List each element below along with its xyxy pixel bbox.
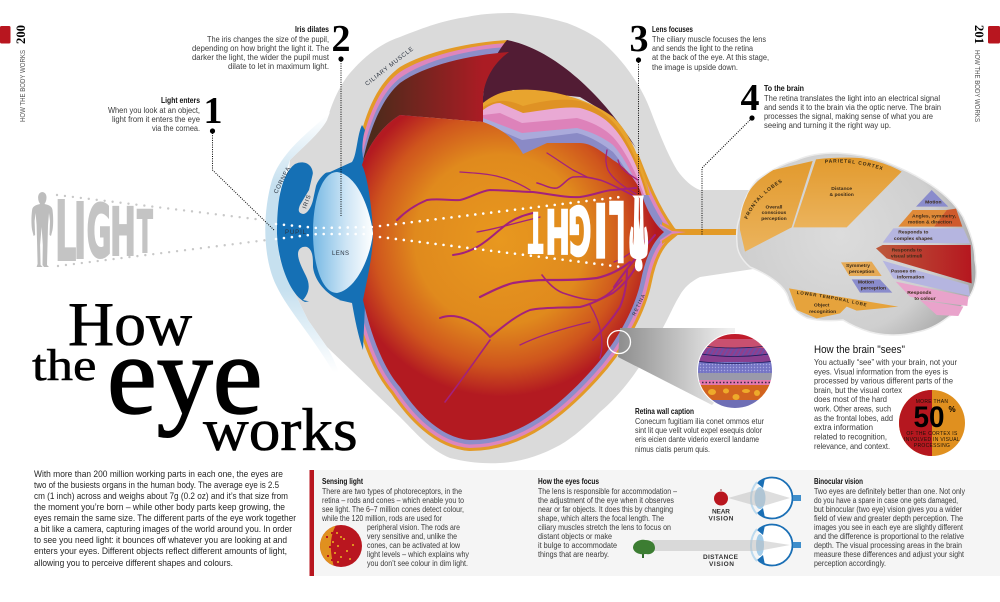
lower temporal lobe region xyxy=(789,288,898,318)
frontal lobes region xyxy=(740,161,813,252)
body: depending on how bright the light it. The xyxy=(192,44,330,53)
word: LIGHT in perspective: I xyxy=(74,188,86,277)
label: iris: IRIS xyxy=(302,194,313,210)
how the eyes focus column xyxy=(538,476,801,568)
body: peripheral vision. The rods are xyxy=(367,523,460,532)
body: perception accordingly. xyxy=(814,559,886,568)
title: works xyxy=(203,397,358,464)
numeral 3: 3 xyxy=(630,18,648,60)
body: The ciliary muscle focuses the lens xyxy=(652,35,766,44)
region labels: perception xyxy=(761,216,787,222)
magnifier cone xyxy=(618,328,735,405)
body: see light. The 6–7 million cones detect colour, xyxy=(322,505,464,514)
lens xyxy=(754,487,766,509)
brain diagram xyxy=(736,152,977,336)
lobe titles: PARIETEL CORTEX xyxy=(825,159,883,170)
region labels: & position xyxy=(829,192,854,198)
optic nerve xyxy=(793,495,801,501)
region labels: Angles, symmetry, xyxy=(912,213,957,219)
body: field of view and greater depth perception. The xyxy=(814,514,963,523)
body xyxy=(652,35,769,72)
cornea front xyxy=(750,523,761,567)
intro paragraph: enters your eyes. Different objects reflect different amounts of light, xyxy=(34,546,287,557)
step 2: iris dilates xyxy=(192,18,350,216)
inverted LIGHT image on retina: I xyxy=(593,187,608,271)
title: the xyxy=(32,341,96,390)
gray dotted rays xyxy=(57,195,267,266)
sensing light column xyxy=(320,477,469,568)
ciliary wedges xyxy=(757,525,765,565)
intro paragraph: the moment you’re born – while other body parts keep growing, the xyxy=(34,502,285,513)
heading: Sensing light xyxy=(322,477,363,486)
caption body: Conecum fugitiam ilia conet ommos etur xyxy=(635,417,764,426)
body: darker the light, the wider the pupil must xyxy=(192,53,330,62)
intro paragraph: to see you need light: it bounces off whatever you are looking at and xyxy=(34,535,287,546)
motion perception region xyxy=(852,279,892,293)
body: and sends the light to the retina xyxy=(652,44,753,53)
incoming light: man and LIGHT word xyxy=(31,184,267,280)
intro paragraph: With more than 200 million working parts in each one, the eyes are xyxy=(34,469,283,480)
binocular vision column xyxy=(814,477,965,568)
cutaway layers xyxy=(483,90,650,195)
icon: standing man silhouette xyxy=(31,192,53,267)
step 1: light enters xyxy=(108,90,274,230)
body: very sensitive and, unlike the xyxy=(367,532,457,541)
icon: apple xyxy=(714,489,728,506)
callout: 50 percent circle: % xyxy=(948,405,956,414)
colour region upper xyxy=(896,282,968,306)
brain outline xyxy=(737,153,976,335)
region labels: Overall xyxy=(766,204,783,210)
body: The iris changes the size of the pupil, xyxy=(207,35,329,44)
region labels: Motion xyxy=(925,200,942,206)
caption body: nimus ciatis perum quis. xyxy=(635,445,710,454)
region labels: Responds to xyxy=(892,248,922,254)
retina wall caption xyxy=(635,407,764,454)
page tab right: number and running head xyxy=(972,25,1000,122)
inverted LIGHT image on retina: G xyxy=(568,191,591,268)
body: depth. The visual processing areas in the brain xyxy=(814,541,962,550)
body xyxy=(538,487,677,559)
caption body: eris eicien dante viderio exercil landame xyxy=(635,435,759,444)
page tab right: number and running head: HOW THE BODY WORKS xyxy=(973,50,980,122)
distance vision diagram xyxy=(633,523,801,568)
word: LIGHT in perspective: H xyxy=(110,195,136,272)
heading: To the brain xyxy=(764,84,804,93)
cornea xyxy=(265,112,347,398)
body: related to recognition, xyxy=(814,432,887,442)
eye wall upper: orange, pink, purple tapered layers xyxy=(361,40,508,170)
label: lens: LENS xyxy=(332,251,350,257)
word: LIGHT in perspective: T xyxy=(137,199,153,266)
body: the adjustment of the eye when it observes xyxy=(538,496,674,505)
page tab left: number and running head: 200 xyxy=(13,25,28,44)
body: ciliary muscles stretch the lens to focus on xyxy=(538,523,671,532)
body xyxy=(108,106,201,133)
angles region red part xyxy=(934,209,962,227)
inverted LIGHT image on retina: H xyxy=(545,195,570,265)
iris gap lower xyxy=(298,247,340,304)
retina wall magnifier xyxy=(608,328,775,413)
body: do you have a spare in case one gets damaged, xyxy=(814,496,958,505)
panel background xyxy=(310,470,1000,576)
heading: Light enters xyxy=(161,96,200,105)
choroid cutaway dark plum xyxy=(483,40,636,148)
callout: 50 percent circle: MORE THAN xyxy=(916,399,948,405)
angles region xyxy=(898,210,947,227)
body: Two eyes are definitely better than one. Not only xyxy=(814,487,965,496)
intro paragraph: cm (1 inch) across and weighs about 7g (0.2 oz) and it’s that size from xyxy=(34,491,288,502)
region labels: perception xyxy=(849,269,874,275)
how the brain sees panel xyxy=(813,344,965,456)
region labels: conscious xyxy=(762,210,787,216)
numeral 2: 2 xyxy=(332,18,350,60)
word: LIGHT in perspective: G xyxy=(86,191,112,275)
caption body xyxy=(635,417,764,454)
region labels: Symmetry xyxy=(846,263,870,269)
magnifier ring on eye wall xyxy=(608,330,630,354)
inverted LIGHT image on retina: L xyxy=(609,182,626,277)
step 3: lens focuses xyxy=(630,18,769,195)
eye outline xyxy=(752,478,792,518)
body xyxy=(814,487,965,568)
eye wall lower: orange, pink, purple layers xyxy=(363,158,664,440)
body: When you look at an object, xyxy=(108,106,200,115)
intro paragraph: eyes remain the same size. The different parts of the eye work together xyxy=(34,513,296,524)
word: LIGHT in perspective xyxy=(55,184,153,280)
body xyxy=(321,487,469,568)
body: it bulge to accommodate xyxy=(538,541,617,550)
body xyxy=(192,35,330,71)
callout: 50 percent circle xyxy=(899,390,965,456)
body: seeing and turning it the right way up. xyxy=(764,121,891,130)
region labels: Responds to xyxy=(898,230,928,236)
blue ciliary body and iris xyxy=(277,125,378,350)
label: retina: RETINA xyxy=(631,293,647,317)
body: as the frontal lobes, add xyxy=(814,414,893,423)
word: LIGHT in perspective: L xyxy=(55,184,76,280)
step 4: to the brain xyxy=(702,77,941,235)
body: brain, but the visual cortex xyxy=(814,386,902,395)
icon: tree xyxy=(633,540,655,558)
intro paragraph: allowing you to perceive different shapes and colours. xyxy=(34,558,233,569)
label: distance vision: VISION xyxy=(709,561,734,568)
label: near vision: NEAR xyxy=(712,508,730,516)
red accent bar xyxy=(310,470,314,576)
body: The retina translates the light into an electrical signal xyxy=(764,94,940,103)
region labels: Passes on xyxy=(891,268,916,274)
label: distance vision xyxy=(703,554,739,568)
motion region xyxy=(916,190,948,207)
eye cross-section diagram xyxy=(265,13,760,463)
optic nerve xyxy=(660,222,748,244)
region labels: information xyxy=(897,275,924,281)
magnified retina layers xyxy=(698,334,772,408)
heading: Iris dilates xyxy=(295,25,329,34)
leader line xyxy=(338,56,344,216)
body: The lens is responsible for accommodation – xyxy=(538,487,677,496)
body: dilate to let in maximum light. xyxy=(228,62,329,71)
body: You actually “see” with your brain, not your xyxy=(814,358,957,367)
region labels: to colour xyxy=(914,296,936,302)
region labels: Responds xyxy=(907,290,932,296)
light beam xyxy=(652,540,790,551)
title: eye xyxy=(107,314,262,438)
leader line xyxy=(702,115,755,235)
body: at the back of the eye. At this stage, xyxy=(652,53,769,62)
eyeball interior with retina gradient xyxy=(362,115,664,440)
body xyxy=(813,358,957,451)
lobe titles xyxy=(744,159,883,306)
body: extra information xyxy=(814,423,873,432)
numeral 1: 1 xyxy=(204,90,222,132)
body: cones, can be activated at low xyxy=(367,541,460,550)
lens xyxy=(313,172,373,293)
callout: 50 percent circle: INVOLVED IN VISUAL xyxy=(904,437,960,443)
region labels: motion & direction xyxy=(908,219,952,225)
page tab left: number and running head: HOW THE BODY WORKS xyxy=(20,50,27,122)
visual stimuli region xyxy=(876,245,972,283)
white light ray dots through the eye xyxy=(276,197,622,267)
eye outline xyxy=(752,524,792,566)
body xyxy=(764,94,941,130)
body: light levels – which explains why xyxy=(367,550,469,559)
label: near vision: VISION xyxy=(708,516,734,522)
callout: 50 percent circle: PROCESSING xyxy=(914,443,950,449)
body: and sends it to the brain via the optic nerve. The brain xyxy=(764,103,941,112)
body: the image is upside down. xyxy=(652,63,738,72)
body: near or far objects. It does this by changing xyxy=(538,505,673,514)
optic nerve xyxy=(793,542,801,548)
inverted LIGHT image on retina xyxy=(528,182,626,277)
retinal blood vessels xyxy=(397,150,655,402)
body: shape, which alters the focal length. The xyxy=(538,514,664,523)
body: processes the signal, making sense of what you are xyxy=(764,112,934,121)
region labels xyxy=(761,186,957,315)
inverted LIGHT image on retina: T xyxy=(528,200,543,263)
magnifier rim xyxy=(698,334,772,408)
title: How xyxy=(68,290,193,359)
lens xyxy=(756,534,764,556)
region labels: recognition xyxy=(809,309,836,315)
region labels: Object xyxy=(814,303,830,309)
intro paragraph xyxy=(34,469,296,569)
passes on information region xyxy=(883,261,970,296)
numeral 4: 4 xyxy=(740,77,760,119)
body: eyes. Visual information from the eyes is xyxy=(814,367,948,376)
heading: Binocular vision xyxy=(814,477,863,486)
intro paragraph: two of the busiests organs in the human body. The average eye is 2.5 xyxy=(34,480,279,491)
body: relevance, and context. xyxy=(814,442,890,451)
label: distance vision: DISTANCE xyxy=(703,554,739,561)
body: light from it enters the eye xyxy=(112,115,201,124)
bottom panel xyxy=(310,470,1000,576)
caption body: sint lit que velit volut expel esequis dolor xyxy=(635,426,762,435)
complex shapes region xyxy=(883,228,970,243)
symmetry perception region xyxy=(841,262,882,276)
callout: 50 percent circle: OF THE CORTEX IS xyxy=(906,431,958,437)
label: near vision xyxy=(708,508,734,522)
interior dark red xyxy=(362,52,509,165)
body: processed by various different parts of the xyxy=(814,377,954,386)
near vision diagram xyxy=(708,476,801,522)
callout: 50 percent circle: 50 xyxy=(914,401,944,434)
body: you don’t see colour in dim light. xyxy=(367,559,468,568)
body: measure these differences and adjust your sight xyxy=(814,550,965,559)
light cone xyxy=(728,489,790,507)
label: ciliary muscle: CILIARY MUSCLE xyxy=(365,46,416,88)
body: while the 120 million, rods are used for xyxy=(321,514,442,523)
region labels: perception xyxy=(861,286,886,292)
heading: Lens focuses xyxy=(652,25,693,34)
page tab left: number and running head xyxy=(0,25,28,122)
intro paragraph: a bit like a camera, capturing images of the world around you. In order xyxy=(34,524,292,535)
body: retina – rods and cones – which enable you to xyxy=(322,496,464,505)
heading: How the brain "sees" xyxy=(814,344,905,356)
label: cornea: CORNEA xyxy=(273,165,292,195)
body: does most of the hard xyxy=(814,395,887,404)
region labels: Distance xyxy=(831,186,852,192)
region labels: Motion xyxy=(858,280,874,286)
inverted human figure on retina xyxy=(630,196,648,271)
body: things that are nearby. xyxy=(538,550,609,559)
label: pupil: PUPIL xyxy=(285,230,307,236)
caption heading: Retina wall caption xyxy=(635,407,694,416)
leader line xyxy=(636,57,641,195)
body: work. Other areas, such xyxy=(813,404,891,414)
colour region lower xyxy=(920,300,963,316)
icon: rods and cones circle xyxy=(320,525,362,567)
ciliary wedges xyxy=(757,478,765,518)
body: but binocular (two eye) vision gives you a wider xyxy=(814,505,962,514)
leader line xyxy=(210,128,274,230)
iris gap upper xyxy=(299,160,345,214)
lobe titles: LOWER TEMPORAL LOBE xyxy=(796,291,867,306)
region labels: complex shapes xyxy=(894,236,933,242)
body: and the difference is proportional to the relative xyxy=(814,532,964,541)
parietal cortex region xyxy=(793,158,902,227)
body: distant objects or make xyxy=(538,532,612,541)
heading: How the eyes focus xyxy=(538,477,599,486)
lobe titles: FRONTAL LOBES xyxy=(744,180,782,220)
title xyxy=(32,290,358,464)
sclera and optic nerve sheath xyxy=(280,13,760,463)
region labels: visual stimuli xyxy=(891,253,923,259)
body: via the cornea. xyxy=(152,124,200,133)
cornea front xyxy=(750,476,761,520)
body: There are two types of photoreceptors, in the xyxy=(322,487,462,496)
page tab right: number and running head: 201 xyxy=(972,25,987,44)
body: images you see in each eye are slightly different xyxy=(814,523,964,532)
